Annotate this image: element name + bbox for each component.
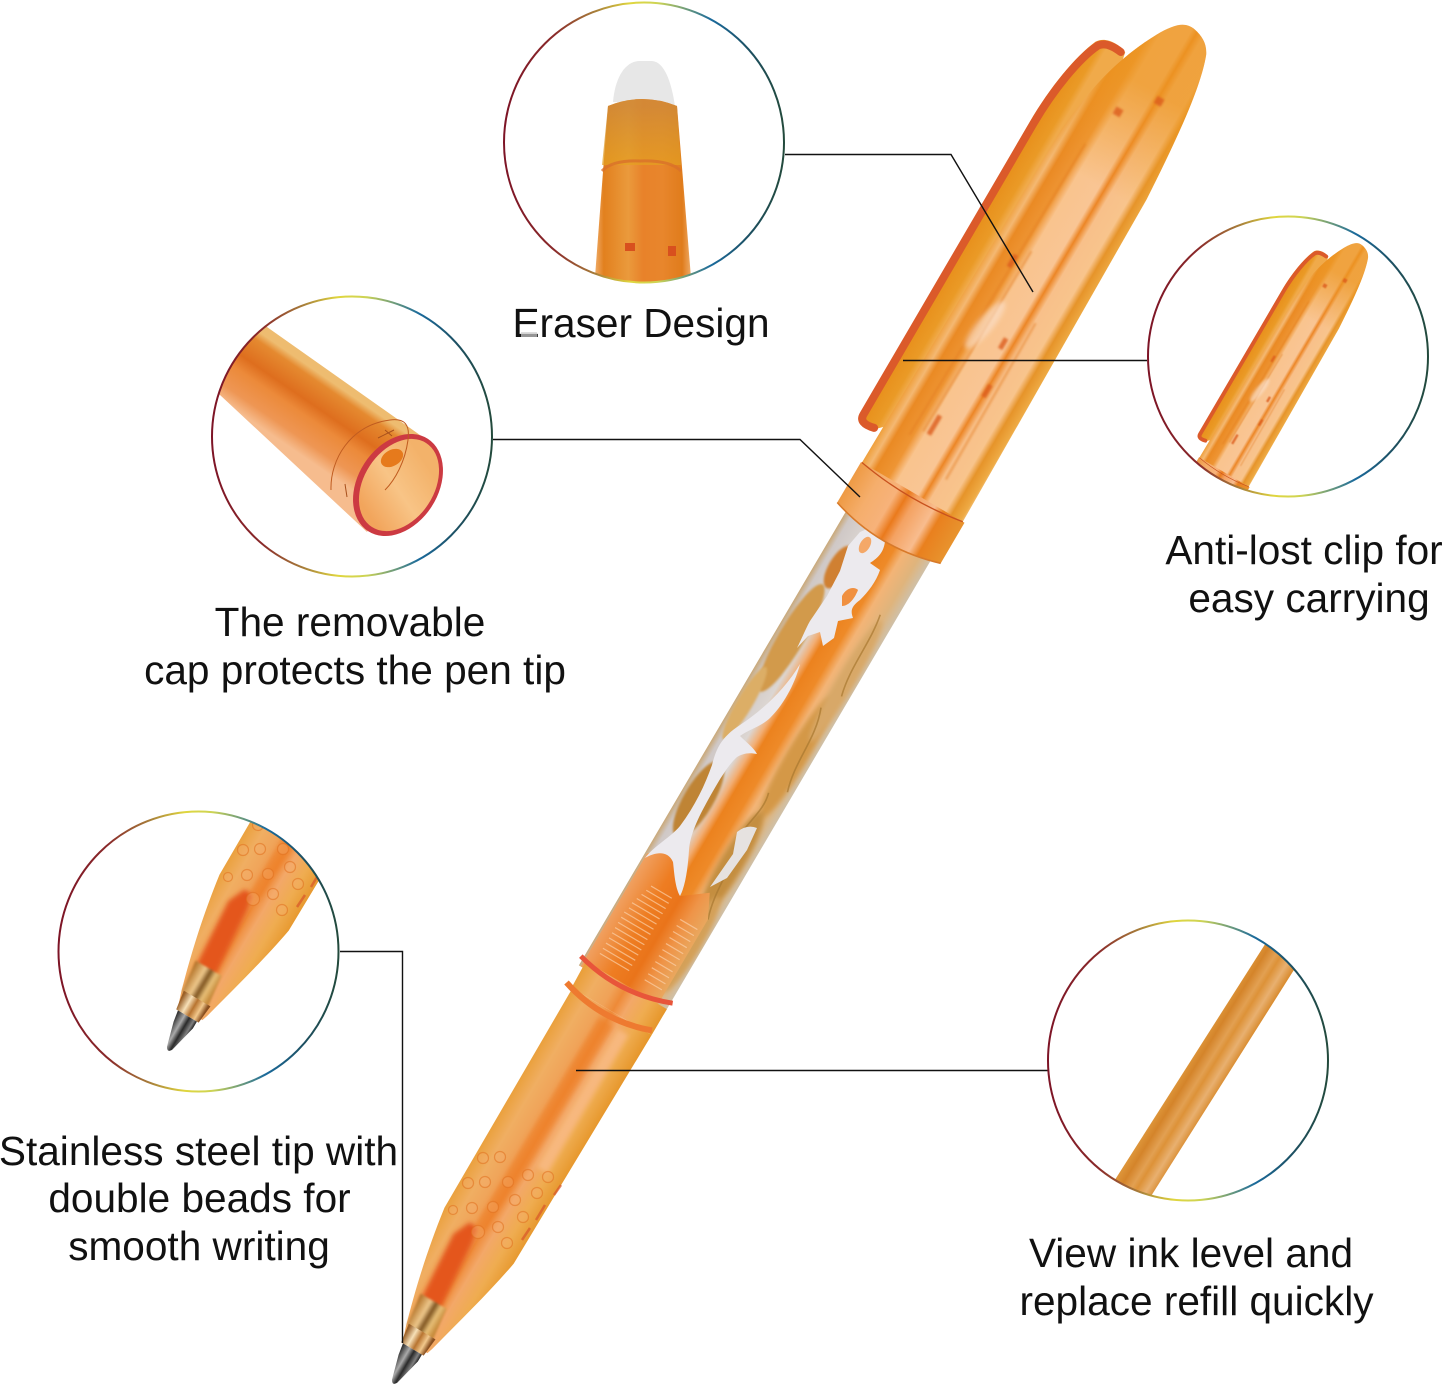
caption: anti-lost clip <box>1165 527 1443 621</box>
silver flame: main <box>645 664 800 896</box>
circle: stainless steel tip detail <box>58 810 340 1092</box>
caption: ink level and refill: replace refill quickly <box>1019 1278 1374 1324</box>
caption: removable cap <box>144 599 566 693</box>
caption: eraser design: Eraser Design <box>512 300 770 346</box>
caption: stainless steel tip: double beads for <box>48 1175 351 1221</box>
leader lines <box>340 154 1147 1343</box>
barrel end rings <box>571 961 667 1035</box>
caption: stainless steel tip: Stainless steel tip with <box>0 1128 398 1174</box>
circle: anti-lost clip detail <box>1148 216 1428 511</box>
caption: stainless steel tip: smooth writing <box>68 1223 330 1269</box>
caption: stainless steel tip <box>0 1128 398 1269</box>
pen barrel with silver flame pattern <box>562 507 934 1041</box>
silver flame: lower right <box>710 827 757 887</box>
caption: ink level and refill <box>1019 1230 1374 1324</box>
cap body <box>861 0 1238 524</box>
caption: ink level and refill: View ink level and <box>1029 1230 1353 1276</box>
caption: anti-lost clip: Anti-lost clip for <box>1165 527 1443 573</box>
pocket clip <box>854 26 1130 447</box>
silver flame: upper curl <box>797 529 885 648</box>
grip dimples <box>448 1152 554 1248</box>
caption: removable cap: cap protects the pen tip <box>144 647 566 693</box>
caption: anti-lost clip: easy carrying <box>1188 575 1430 621</box>
circle: removable cap detail <box>180 296 492 576</box>
collar <box>832 462 964 572</box>
pen cap with clip and collar <box>809 0 1239 572</box>
caption: removable cap: The removable <box>215 599 485 645</box>
circle: ink refill detail <box>1048 920 1328 1212</box>
pen grip and writing tip <box>354 988 652 1388</box>
pen: main orange erasable pen <box>354 0 1239 1388</box>
circle: eraser design detail <box>504 2 784 290</box>
